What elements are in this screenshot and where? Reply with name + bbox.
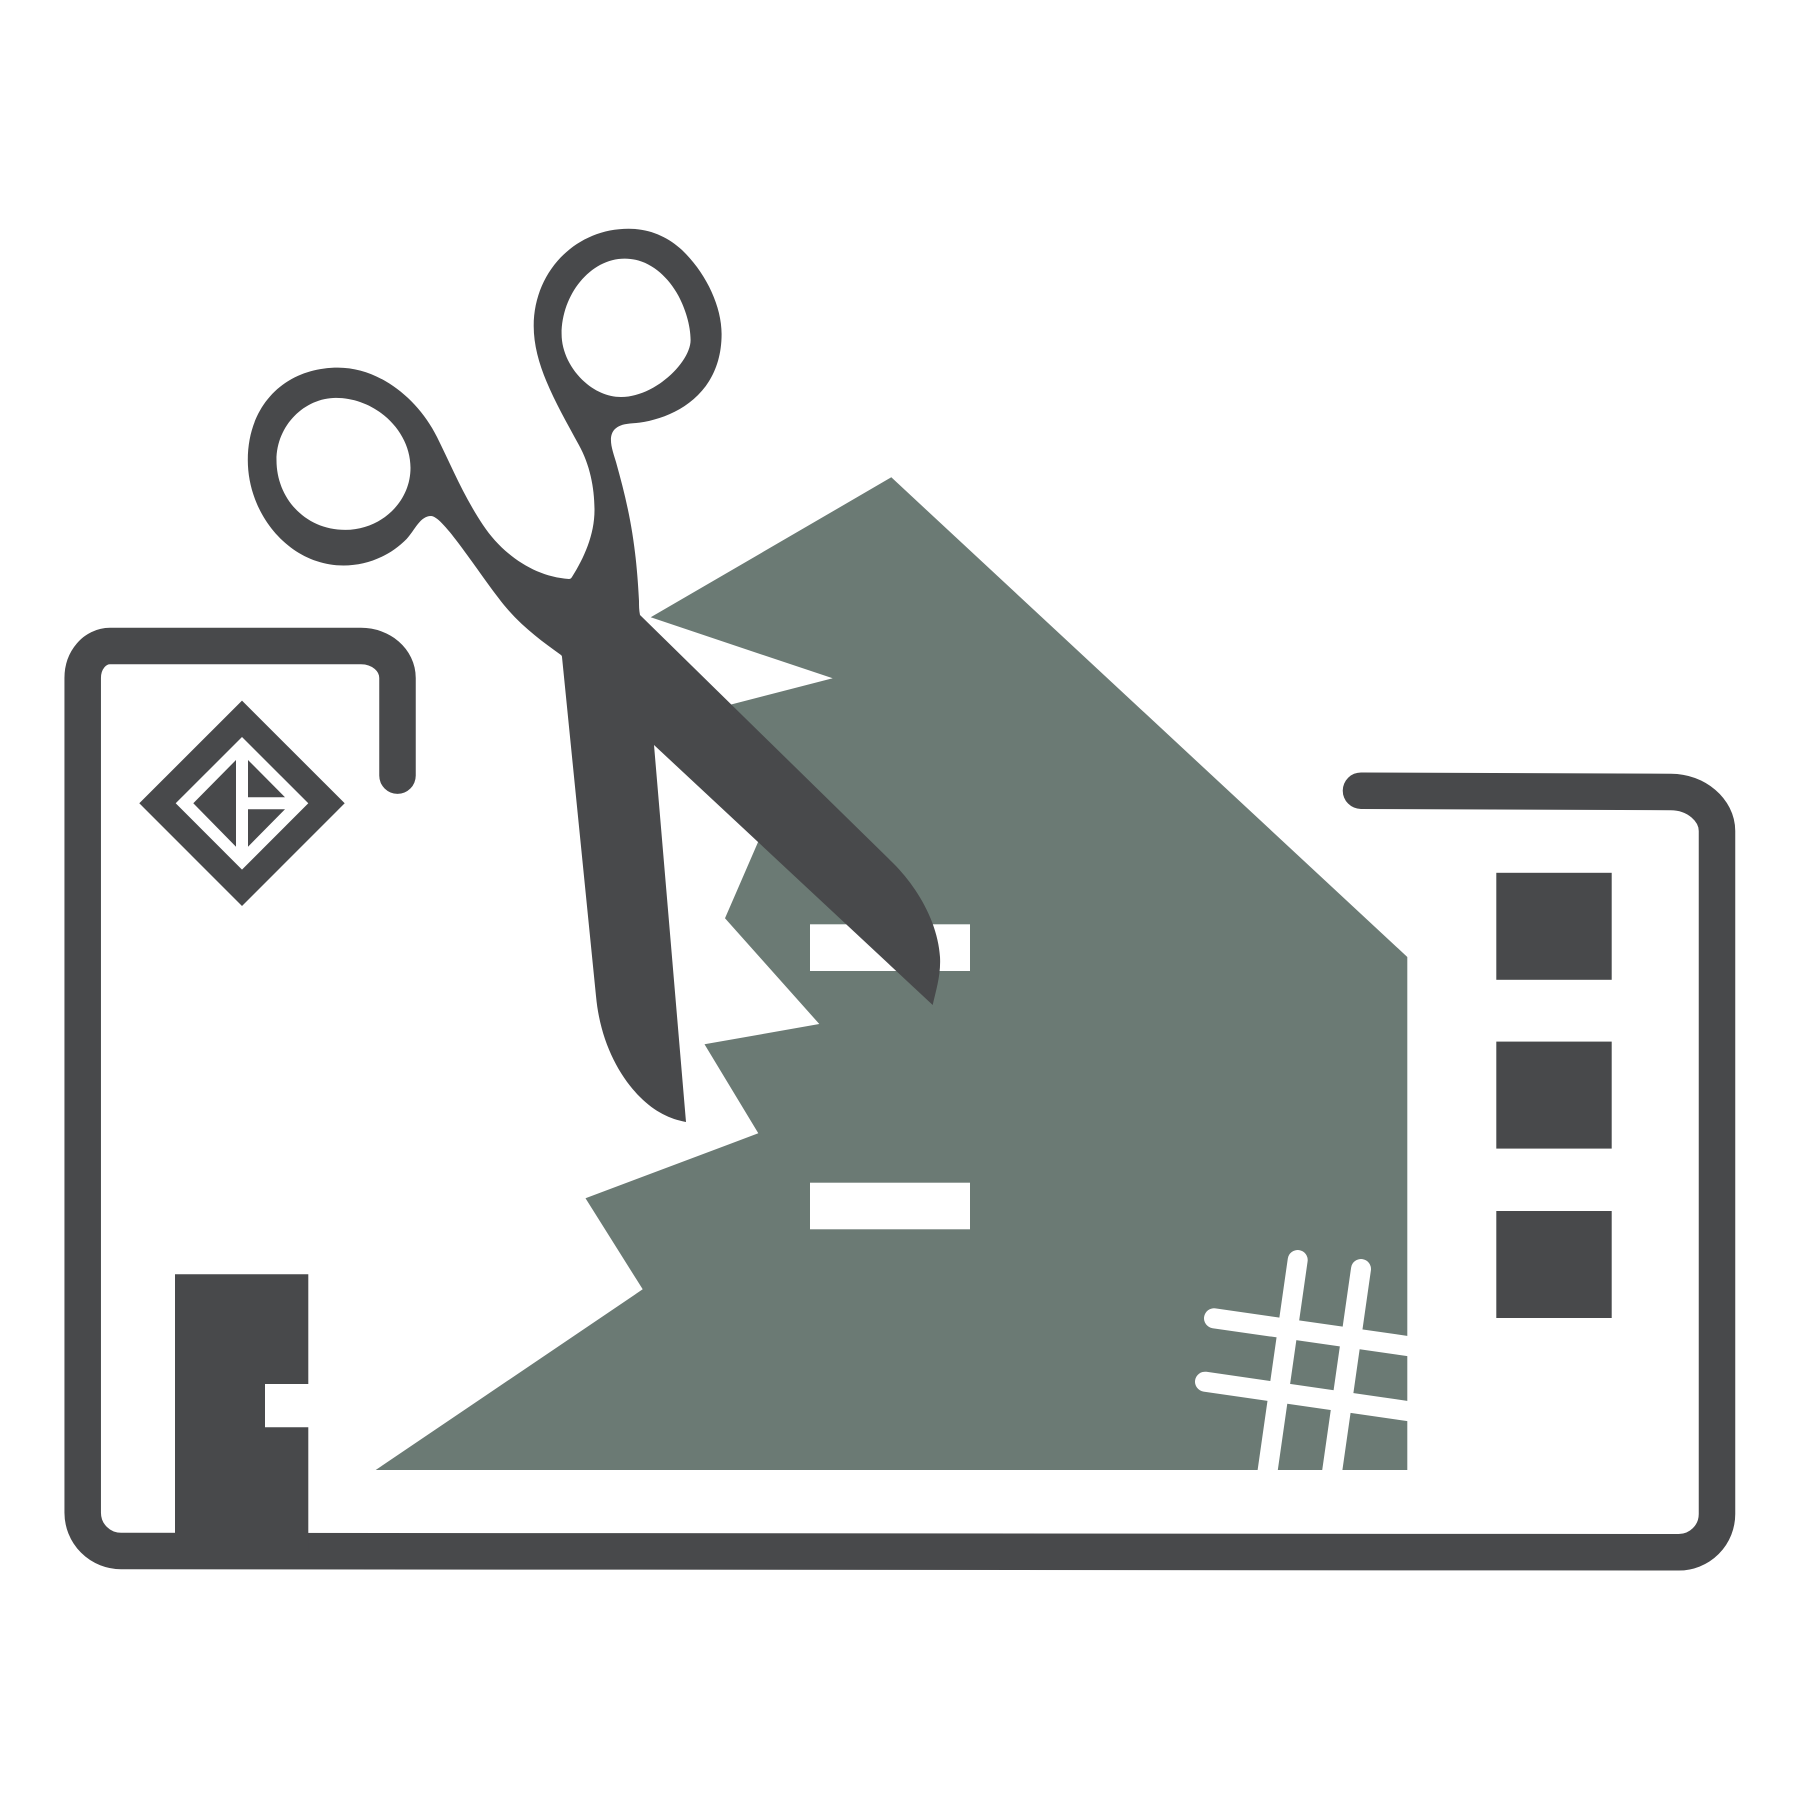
scissors icon [248,229,940,1122]
white bar upper [810,924,970,971]
white bar lower [810,1183,970,1229]
dark notched block bottom left [175,1274,308,1552]
diamond logo icon [139,701,345,906]
hash symbol [1205,1260,1415,1475]
three dark squares right column [1496,873,1612,1318]
coupon outline frame [83,646,1717,1552]
green torn coupon panel [376,477,1415,1475]
